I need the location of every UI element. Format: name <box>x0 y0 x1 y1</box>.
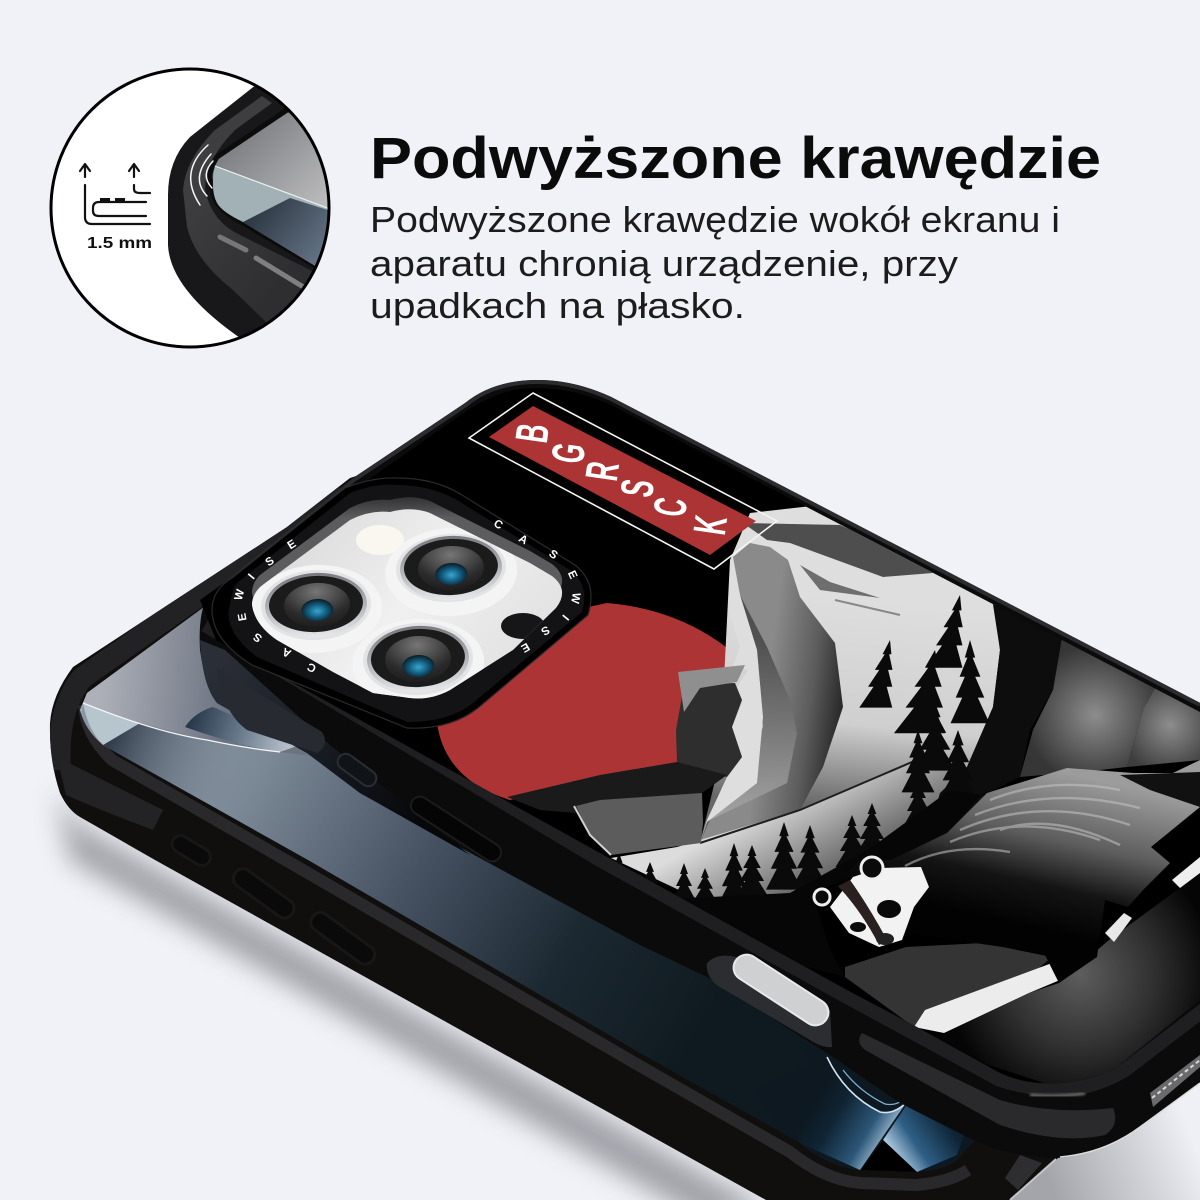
label wordmark: K <box>683 512 737 538</box>
back phone buttons <box>169 832 378 968</box>
flash <box>356 525 404 555</box>
label wordmark: C <box>643 494 697 520</box>
CASEWISE ring text <box>233 518 582 674</box>
CASEWISE ring text: E <box>565 569 579 581</box>
inset circle: raised edge detail <box>51 69 340 347</box>
lidar sensor <box>501 613 545 639</box>
left dark rock <box>676 683 742 777</box>
mountain fold big <box>700 543 843 843</box>
camera window <box>252 509 562 698</box>
lens top <box>386 528 517 616</box>
carbon patch near camera <box>217 668 325 753</box>
CASEWISE ring text: A <box>281 645 293 659</box>
badger tail shadow <box>1120 772 1200 807</box>
CASEWISE ring text: S <box>538 623 551 637</box>
mountain fold lower <box>710 595 797 820</box>
label wordmark <box>505 420 737 538</box>
dark foreground ground <box>695 798 938 907</box>
top rim highlight <box>208 382 1200 705</box>
carbon side wall near camera <box>200 640 470 855</box>
back phone corner edge <box>1010 1159 1056 1200</box>
back phone bumper <box>50 430 1100 1200</box>
inner bevel <box>252 497 562 686</box>
body copy: Podwyższone krawędzie wokół ekranu i <box>370 199 1060 240</box>
label wordmark: R <box>575 458 629 484</box>
camera base <box>212 478 591 728</box>
carbon patch on corner <box>859 1033 1115 1138</box>
light mountain body <box>700 505 1000 843</box>
camera island <box>212 478 591 728</box>
CASEWISE ring text: S <box>546 548 560 562</box>
phone shadow <box>55 790 770 1200</box>
right mountain one <box>1020 632 1165 777</box>
lens bottom <box>361 621 484 698</box>
speaker slot <box>334 751 380 789</box>
inset phone corner close-up <box>168 84 340 340</box>
trees <box>606 595 990 915</box>
brand label <box>469 393 777 569</box>
lens left <box>252 565 378 653</box>
silver edge detail <box>1150 1055 1200 1107</box>
badger fur strokes <box>905 785 1140 866</box>
red sun <box>437 603 747 800</box>
CASEWISE ring text: A <box>516 533 530 547</box>
wallpaper fans <box>802 1080 904 1170</box>
CASEWISE ring text: S <box>251 630 265 644</box>
front phone in case <box>190 380 1200 1158</box>
CASEWISE ring text: W <box>568 592 582 605</box>
CASEWISE ring text: E <box>236 612 250 622</box>
back phone rim band <box>59 495 968 1185</box>
printed artwork <box>190 380 1200 1100</box>
back phone screen <box>80 608 974 1172</box>
lower slope <box>611 764 950 898</box>
dark forest mass <box>938 604 1062 823</box>
charging port <box>707 950 833 1047</box>
CASEWISE ring text: E <box>518 640 531 654</box>
badger body <box>860 760 1200 983</box>
back phone carbon patch <box>57 757 163 830</box>
CASEWISE ring text: C <box>491 518 505 532</box>
icon: raised edge diagram <box>80 164 150 224</box>
body copy: aparatu chronią urządzenie, przy <box>370 243 958 284</box>
icon label: 1.5 mm <box>87 235 152 252</box>
CASEWISE ring text: I <box>559 612 571 622</box>
back phone in case <box>50 476 1058 1200</box>
label wordmark: G <box>541 440 595 466</box>
CASEWISE ring text: E <box>286 538 299 552</box>
body copy: upadkach na płasko. <box>370 285 745 326</box>
long side button <box>407 793 505 865</box>
front phone silhouette and side wall <box>200 380 1200 1158</box>
camera ring <box>229 485 584 722</box>
label wordmark: S <box>610 476 664 500</box>
CASEWISE ring text: I <box>246 572 258 582</box>
CASEWISE ring text: W <box>233 588 247 602</box>
label outline <box>469 393 777 569</box>
rim ridges <box>205 625 1200 1089</box>
CASEWISE ring text: S <box>263 555 277 569</box>
badger face <box>830 867 929 947</box>
heading: Podwyższone krawędzie <box>370 126 1101 191</box>
lower rocks <box>845 943 1052 1027</box>
upper ridge ribbon <box>743 523 945 577</box>
impact arcs <box>191 145 213 205</box>
label wordmark: B <box>505 420 559 446</box>
badger <box>812 760 1200 983</box>
white snow strip <box>702 594 763 838</box>
right mountain two <box>1127 680 1200 767</box>
CASEWISE ring text: C <box>306 660 318 674</box>
label red bar <box>489 406 756 555</box>
corner shadow <box>1000 1060 1200 1200</box>
